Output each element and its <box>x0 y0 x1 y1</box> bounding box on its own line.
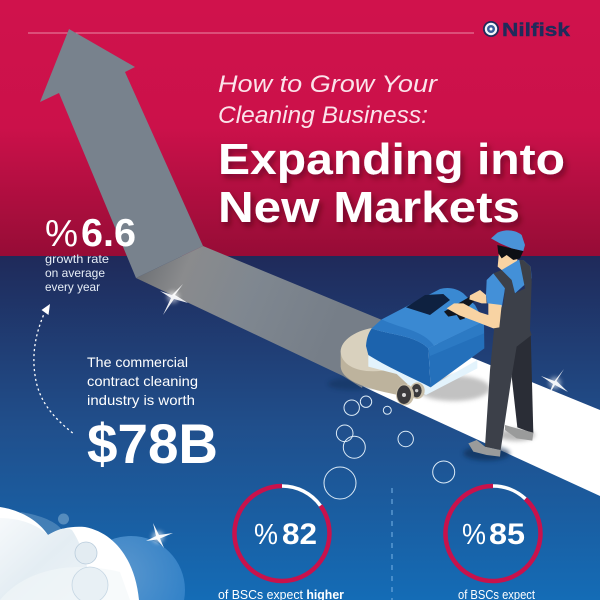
sleeve <box>486 273 505 308</box>
rear leg <box>512 332 533 433</box>
gauge: 85 percent: % <box>462 519 486 551</box>
text: market size <box>87 354 218 475</box>
stat: 6.6 percent growth: % <box>45 213 78 255</box>
neck <box>498 248 517 273</box>
stat: 6.6 percent growth: every year <box>45 280 100 294</box>
gauge: 82 percent: % <box>254 519 278 551</box>
cleaning disc <box>341 327 413 395</box>
machine front <box>366 328 431 387</box>
stat: 6.6 percent growth: on average <box>45 266 105 280</box>
cap <box>491 230 525 251</box>
road shadow under disc <box>328 378 376 390</box>
red header background <box>0 0 600 256</box>
machine base <box>368 353 477 395</box>
text: market size: The commercial <box>87 354 188 370</box>
hair <box>497 245 523 260</box>
title: Expanding into New Markets <box>218 135 565 232</box>
logo: Nilfisk: Nilfisk <box>502 20 571 40</box>
arm <box>447 303 502 328</box>
gauge: 85 percent: 85 <box>489 518 525 551</box>
gauge: 85 percent <box>445 486 540 581</box>
control panel <box>406 294 450 315</box>
floor shadow <box>417 376 490 401</box>
wheels <box>396 382 425 405</box>
overalls <box>485 260 532 450</box>
shoes <box>505 425 533 441</box>
sparkle on foam <box>146 523 173 548</box>
white cleaned strip <box>360 320 600 496</box>
shirt <box>502 260 532 293</box>
bubbles <box>324 396 455 499</box>
cloud of foam <box>0 507 185 600</box>
title: How to Grow <box>218 71 438 129</box>
blue lower background <box>0 256 600 600</box>
stat: 6.6 percent growth: growth rate <box>45 252 109 266</box>
growth arrow road <box>40 29 382 388</box>
gauge: 82 percent <box>234 486 329 581</box>
sparkle on strip <box>541 369 568 398</box>
text: market size: $78B <box>87 412 218 475</box>
logo: Nilfisk <box>483 20 571 40</box>
machine top <box>372 288 484 348</box>
text: market size: industry is worth <box>87 392 195 408</box>
header rule <box>28 32 474 34</box>
title: How to Grow: How to Grow Your <box>218 71 438 98</box>
title: Expanding into New Markets: Expanding into <box>218 135 565 184</box>
machine side <box>428 322 484 387</box>
sparkle on arrow <box>160 284 188 315</box>
handle <box>444 297 475 320</box>
dotted arrow <box>34 304 73 433</box>
title: How to Grow: Cleaning Business: <box>218 102 428 129</box>
divider <box>391 488 393 600</box>
text: market size: contract cleaning <box>87 373 198 389</box>
stat: 6.6 percent growth: 6.6 <box>81 212 136 255</box>
scrubber machine and worker <box>341 230 535 461</box>
stat: 6.6 percent growth <box>45 212 136 294</box>
title: Expanding into New Markets: New Markets <box>218 183 520 232</box>
gauge: 82 percent: 82 <box>282 518 317 551</box>
